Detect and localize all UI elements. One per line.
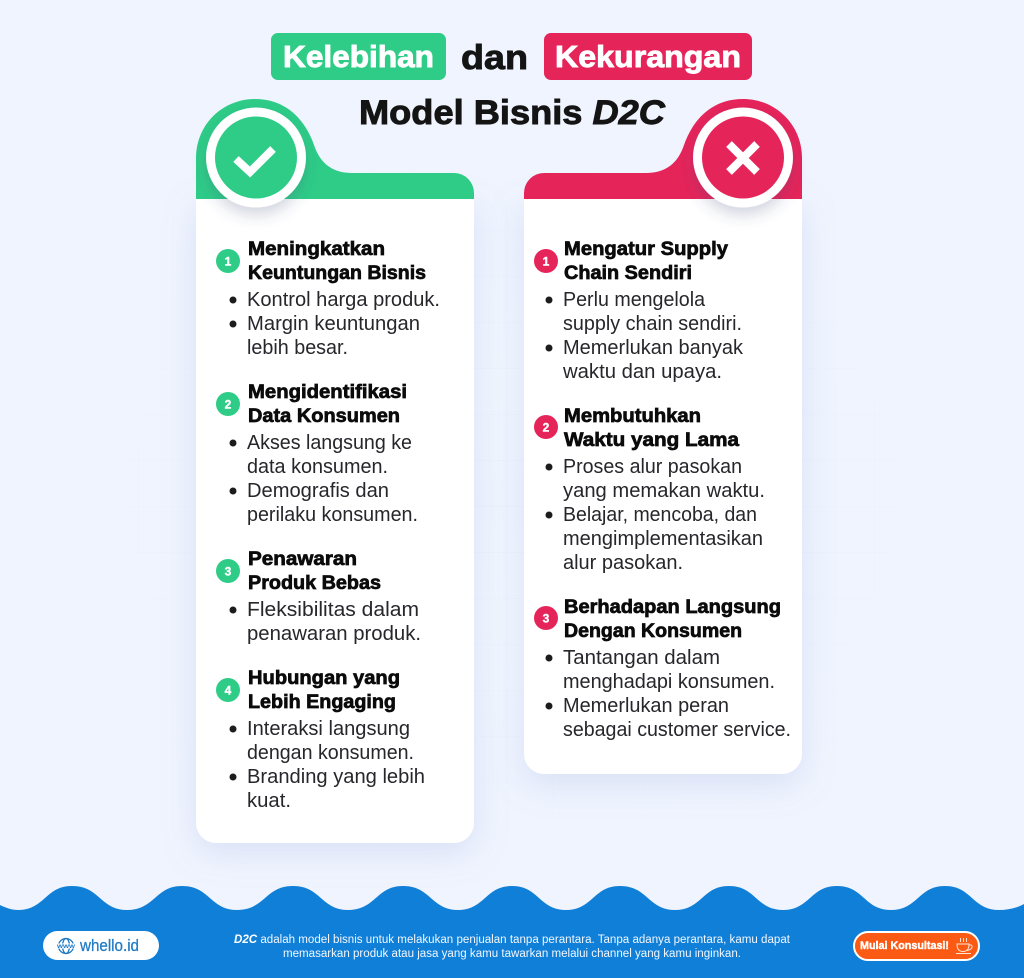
item heading (564, 597, 781, 642)
panel: kelebihan (196, 99, 474, 843)
item bullets: lebih besar. (247, 337, 348, 359)
item heading (248, 668, 400, 713)
item heading: Meningkatkan (248, 239, 385, 260)
item heading: Chain Sendiri (564, 263, 692, 284)
item 2: Membutuhkan Waktu yang Lama (534, 406, 765, 574)
item heading (564, 406, 739, 451)
button label: Mulai Konsultasi! (860, 940, 949, 952)
item bullets: Interaksi langsung (247, 718, 410, 740)
item bullets: perilaku konsumen. (247, 504, 418, 526)
item 3: Berhadapan Langsung Dengan Konsumen (534, 597, 791, 741)
card header tab (524, 99, 802, 199)
item bullets (546, 456, 765, 574)
item heading: Penawaran (248, 549, 357, 570)
footer wave band (0, 886, 1024, 978)
item bullets (230, 599, 421, 645)
number badge 3: 3 (543, 612, 550, 626)
number badge 2 (216, 392, 240, 416)
item 1: Meningkatkan Keuntungan Bisnis (216, 239, 440, 359)
number badge 3: 3 (225, 564, 232, 578)
item bullets: data konsumen. (247, 456, 388, 478)
item bullets (546, 289, 744, 383)
item bullets: kuat. (247, 790, 291, 812)
item bullets: penawaran produk. (247, 623, 421, 645)
number badge 3 (534, 606, 558, 630)
title pill: Kelebihan (271, 33, 446, 80)
item heading: Membutuhkan (564, 406, 701, 427)
icon: check mark (206, 108, 306, 208)
item bullets: Akses langsung ke (247, 432, 412, 454)
item bullets: sebagai customer service. (563, 719, 791, 741)
item bullets: Margin keuntungan (247, 313, 420, 335)
item heading: Keuntungan Bisnis (248, 263, 426, 284)
item 1: Mengatur Supply Chain Sendiri (534, 239, 744, 383)
item bullets: Branding yang lebih (247, 766, 425, 788)
title (271, 33, 752, 132)
number badge 4: 4 (225, 684, 232, 698)
item bullets: waktu dan upaya. (562, 361, 722, 383)
item heading: Lebih Engaging (248, 692, 396, 713)
item bullets: Tantangan dalam (563, 647, 720, 669)
item heading: Waktu yang Lama (564, 430, 739, 451)
panel: kekurangan (524, 99, 802, 774)
footer description: memasarkan produk atau jasa yang kamu tawarkan melalui channel yang kamu inginkan. (283, 948, 741, 960)
item 3: Penawaran Produk Bebas (216, 549, 421, 645)
number badge 1: 1 (225, 254, 232, 268)
icon: www globe: www (56, 944, 75, 950)
item bullets: supply chain sendiri. (563, 313, 742, 335)
item bullets: Fleksibilitas dalam (247, 599, 419, 621)
number badge 1 (534, 249, 558, 273)
number badge 1: 1 (543, 254, 550, 268)
item heading: Berhadapan Langsung (564, 597, 781, 618)
item bullets: alur pasokan. (563, 552, 683, 574)
number badge 3 (216, 559, 240, 583)
item bullets: menghadapi konsumen. (563, 671, 775, 693)
item heading: Mengatur Supply (564, 239, 728, 260)
item heading: Data Konsumen (248, 406, 400, 427)
item 2: Mengidentifikasi Data Konsumen (216, 382, 418, 526)
item heading (248, 549, 381, 594)
title line 2: Model Bisnis D2C (359, 94, 665, 132)
item heading: Produk Bebas (248, 573, 381, 594)
footer description: D2C adalah model bisnis untuk melakukan penjualan tanpa perantara. Tanpa adanya perantara, kamu dapat (234, 934, 791, 946)
item heading: Dengan Konsumen (564, 621, 742, 642)
item heading: Hubungan yang (248, 668, 400, 689)
item bullets (230, 718, 425, 812)
item bullets: Proses alur pasokan (563, 456, 742, 478)
item bullets: Belajar, mencoba, dan (563, 504, 757, 526)
item bullets (546, 647, 791, 741)
item bullets: Perlu mengelola (563, 289, 706, 311)
card header tab (196, 99, 474, 199)
number badge 1 (216, 249, 240, 273)
card body (196, 198, 474, 843)
title pill: Kekurangan (544, 33, 752, 80)
item bullets: Kontrol harga produk. (247, 289, 440, 311)
item bullets (230, 289, 440, 359)
item heading (248, 382, 407, 427)
icon: cross mark (693, 108, 793, 208)
item bullets (230, 432, 418, 526)
title word: dan: dan (461, 39, 528, 77)
item bullets: yang memakan waktu. (563, 480, 765, 502)
website pill (43, 931, 159, 960)
item 4: Hubungan yang Lebih Engaging (216, 668, 425, 812)
number badge 2 (534, 415, 558, 439)
item bullets: dengan konsumen. (247, 742, 414, 764)
item bullets: mengimplementasikan (563, 528, 763, 550)
consult button (854, 932, 979, 960)
number badge 2: 2 (225, 398, 232, 412)
item bullets: Demografis dan (247, 480, 389, 502)
card body (524, 198, 802, 774)
number badge 4 (216, 678, 240, 702)
title pill: Kelebihan: Kelebihan (283, 39, 434, 74)
item bullets: Memerlukan peran (563, 695, 729, 717)
website label: whello.id (79, 936, 139, 955)
item heading: Mengidentifikasi (248, 382, 407, 403)
title pill: Kekurangan: Kekurangan (555, 39, 741, 74)
number badge 2: 2 (543, 420, 550, 434)
item heading (248, 239, 426, 284)
icon: coffee cup (956, 938, 972, 954)
footer description (234, 934, 791, 960)
item heading (564, 239, 728, 284)
item bullets: Memerlukan banyak (563, 337, 744, 359)
